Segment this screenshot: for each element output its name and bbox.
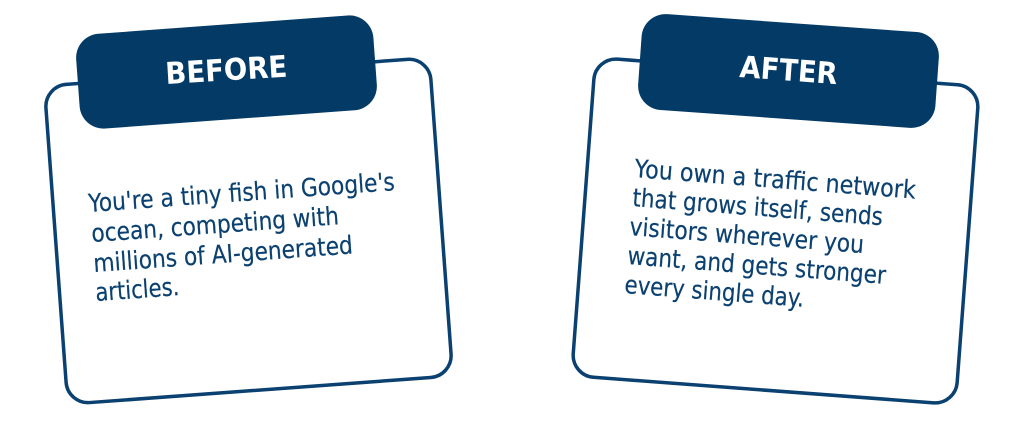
after body text — [624, 154, 917, 313]
heading: before: BEFORE — [164, 50, 288, 92]
after heading tab — [636, 12, 941, 130]
before body text: articles. — [94, 272, 180, 307]
after body text: every single day. — [624, 270, 805, 313]
after body text: that grows itself, sends — [632, 183, 884, 231]
heading: after: AFTER — [738, 50, 839, 92]
after body text: want, and gets stronger — [627, 241, 888, 290]
panel: after — [572, 12, 979, 404]
before body text: ocean, competing with — [90, 201, 340, 248]
before heading tab — [74, 14, 379, 130]
after card outline — [572, 58, 979, 404]
after body text: visitors wherever you — [629, 212, 865, 259]
before body text — [86, 167, 396, 307]
before card outline — [44, 58, 453, 404]
after body text: You own a traffic network — [633, 154, 917, 205]
before body text: millions of AI-generated — [92, 230, 354, 278]
before body text: You're a tiny fish in Google's — [86, 167, 396, 218]
panel: before — [44, 14, 453, 404]
